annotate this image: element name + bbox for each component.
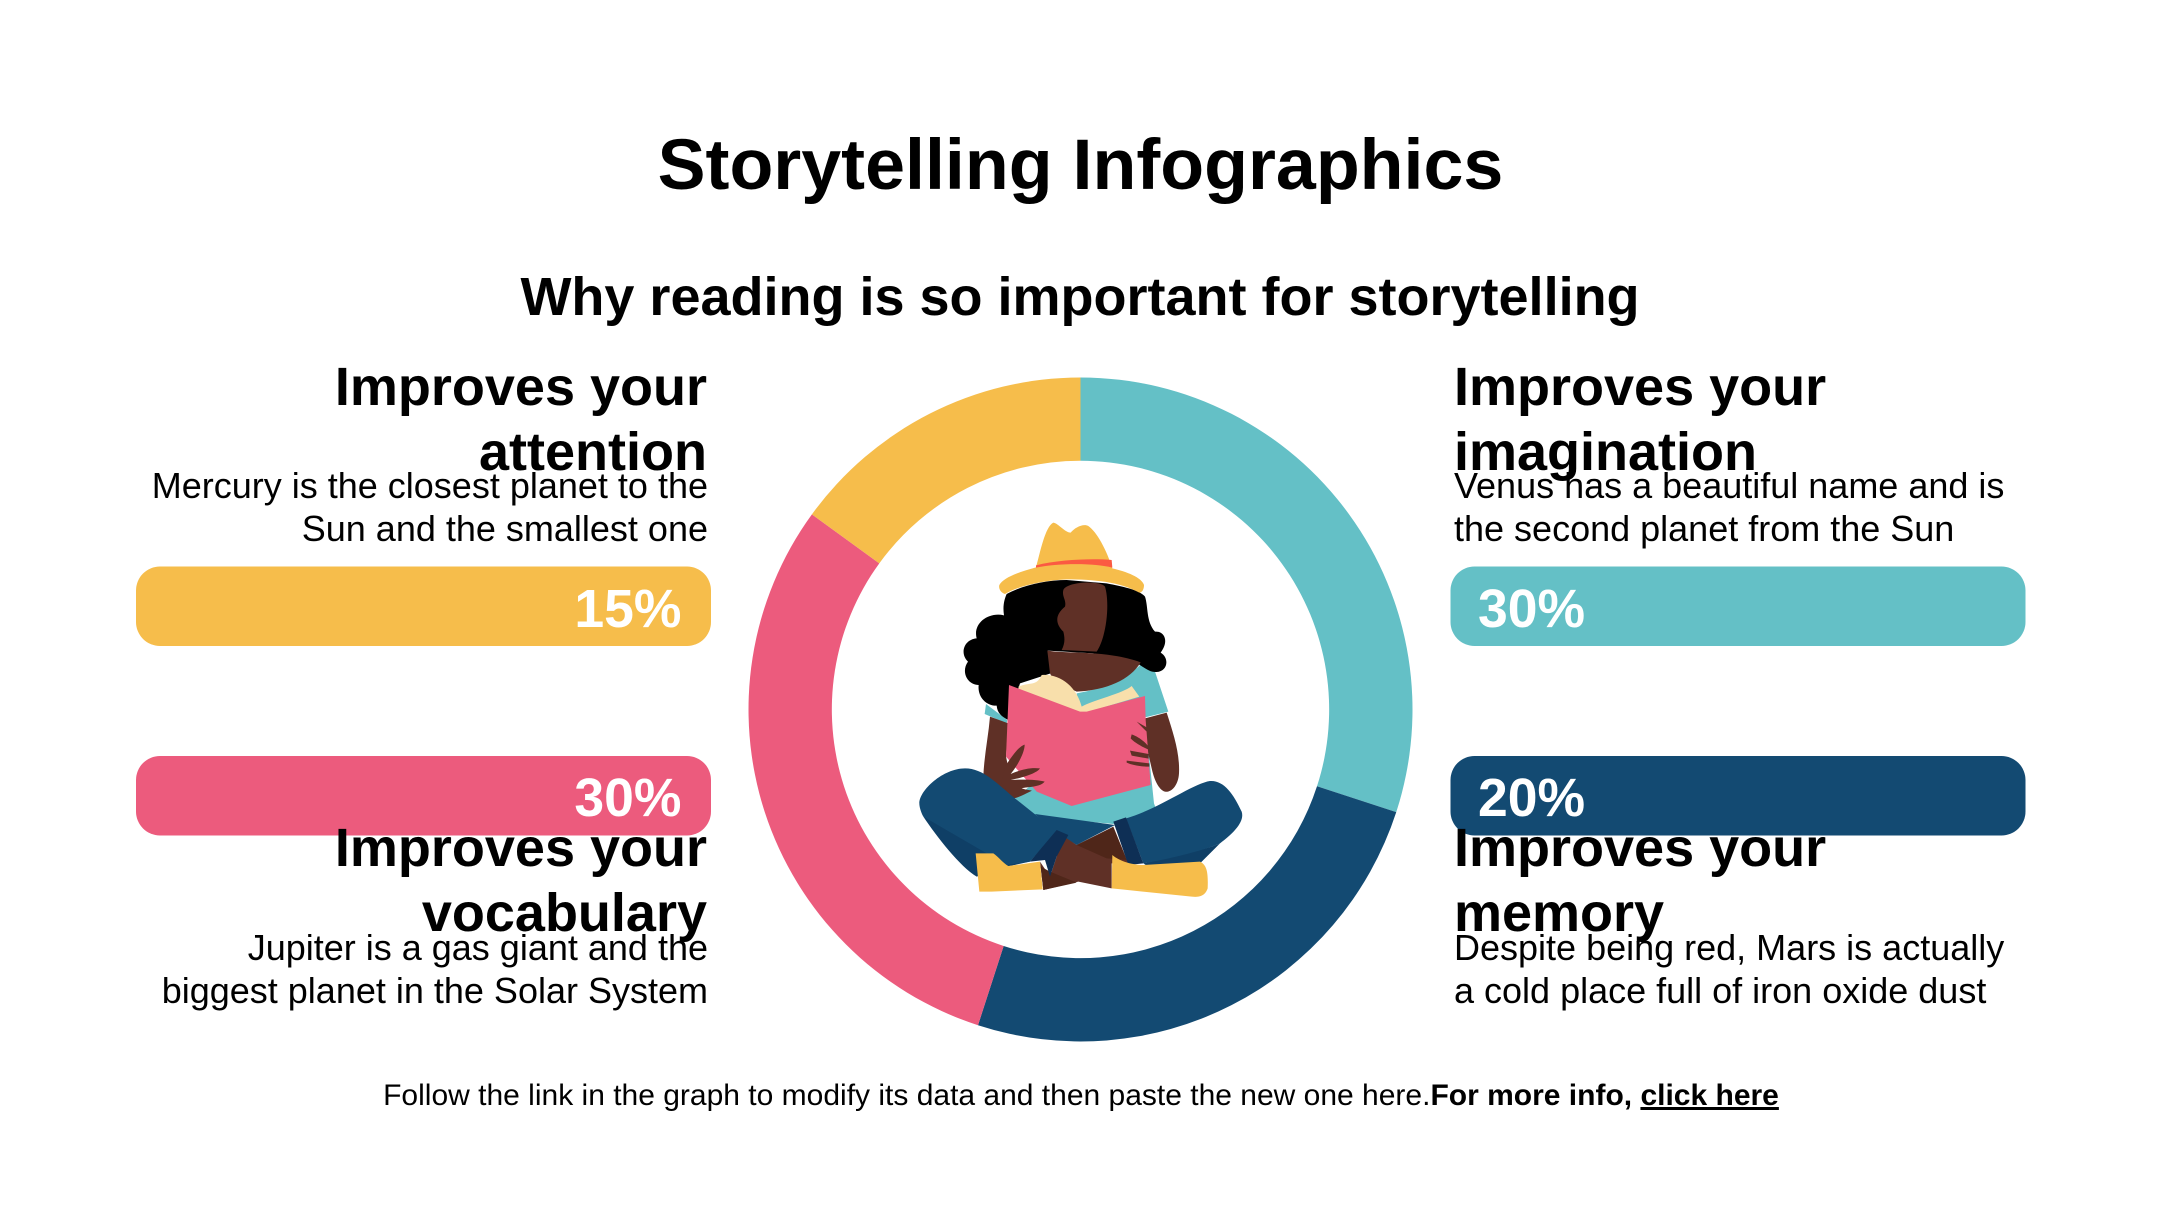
- panel: vocabulary: biggest planet in the Solar System: [162, 970, 708, 1011]
- panel: attention: Mercury is the closest planet to the: [152, 465, 708, 506]
- illustration: woman reading a book: [919, 523, 1242, 897]
- panel: attention: Sun and the smallest one: [302, 508, 708, 549]
- panel: memory: Despite being red, Mars is actually: [1454, 927, 2004, 968]
- panel: memory: 20%: [1478, 769, 1585, 828]
- panel: imagination: Improves your: [1454, 357, 1826, 417]
- panel: attention: [136, 357, 711, 646]
- panel: imagination: Venus has a beautiful name and is: [1454, 465, 2004, 506]
- left hand fingers: [1002, 745, 1045, 798]
- footer note: Follow the link in the graph to modify its data and then paste the new one here.For more info, click here: [383, 1079, 1779, 1112]
- panel: attention: 15%: [574, 580, 682, 639]
- panel: imagination: imagination: [1454, 422, 1757, 482]
- panel: attention: Improves your: [335, 357, 707, 417]
- panel: vocabulary: Jupiter is a gas giant and the: [248, 927, 708, 968]
- panel: imagination: [1450, 357, 2026, 646]
- panel: memory: [1450, 756, 2026, 1011]
- panel: attention: attention: [479, 422, 707, 482]
- panel: imagination: 30%: [1478, 580, 1585, 639]
- panel: vocabulary: Improves your: [335, 818, 707, 878]
- panel: imagination: the second planet from the Sun: [1454, 508, 1954, 549]
- panel: vocabulary: [136, 756, 711, 1011]
- title: Storytelling Infographics: [658, 125, 1503, 205]
- panel: memory: memory: [1454, 883, 1664, 943]
- subtitle: Why reading is so important for storytelling: [520, 267, 1640, 327]
- panel: vocabulary: 30%: [574, 769, 682, 828]
- panel: vocabulary: vocabulary: [422, 883, 707, 943]
- panel: memory: Improves your: [1454, 818, 1826, 878]
- panel: memory: a cold place full of iron oxide dust: [1454, 970, 1986, 1011]
- donut chart: [749, 378, 1413, 1041]
